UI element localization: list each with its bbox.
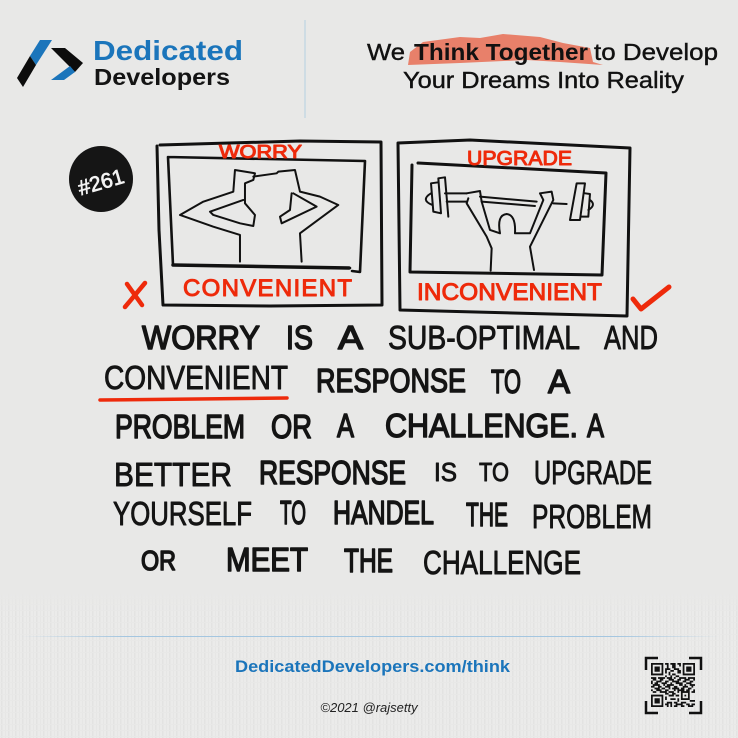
tagline line 1: We [367,39,405,65]
line 3: OR [271,408,312,445]
handwritten message [100,319,658,581]
icon: red cross [125,283,145,307]
worry label: WORRY [219,142,302,162]
footer url: DedicatedDevelopers.com/think [235,657,511,676]
line 5 [113,494,652,535]
tagline [367,34,718,93]
line 3: CHALLENGE. [385,407,578,444]
line 6: THE [344,542,393,579]
icon: weightlifter [426,177,593,271]
brush highlight [408,34,603,65]
line 5: PROBLEM [532,498,652,535]
line 1: AND [604,319,658,356]
line 1 [142,319,658,356]
badge: #261: #261 [76,165,127,200]
line 2: CONVENIENT [104,359,288,396]
line 3: A [337,407,354,444]
line 5: TO [280,494,306,531]
line 4: UPGRADE [534,454,652,491]
QR corner brackets [646,658,701,713]
line 2: TO [491,363,521,400]
line 5: YOURSELF [113,495,252,532]
tagline line 1 [367,39,718,65]
badge: #261 [69,146,133,212]
label: inconvenient: INCONVENIENT [417,279,602,306]
line 1: A [338,319,363,356]
line 2: RESPONSE [316,362,466,399]
upgrade label: UPGRADE [467,148,572,170]
logo mark [17,40,83,87]
line 6 [141,541,581,581]
QR code [646,658,701,713]
tagline line 1: to Develop [594,39,718,65]
upgrade frames [398,140,630,316]
line 6: MEET [226,541,308,578]
line 4: IS [434,457,457,487]
logo wordmark: Developers: Developers [94,64,230,90]
QR modules [651,663,695,707]
worry frames [157,141,382,306]
line 2 [104,359,570,400]
line 3 [115,407,604,445]
logo [17,35,243,90]
line 6: CHALLENGE [423,544,581,581]
line 6: OR [141,545,176,576]
line 2: A [548,363,570,400]
tagline line 2: Your Dreams Into Reality [403,67,685,93]
line 4: TO [479,457,509,487]
line 1: SUB-OPTIMAL [388,319,580,356]
red underline [100,398,287,400]
line 3: PROBLEM [115,408,245,445]
line 4 [114,454,652,493]
panel: worry [125,141,382,307]
line 3: A [587,407,604,444]
tagline line 1: Think Together [414,39,588,65]
panel: upgrade [398,140,669,316]
line 1: WORRY [142,319,260,356]
logo wordmark: Dedicated: Dedicated [93,35,243,66]
footer divider [20,636,720,637]
line 5: HANDEL [333,494,434,531]
line 5: THE [466,496,508,533]
icon: red check [633,287,669,309]
icon: person holding head [180,170,338,262]
header divider [304,20,306,118]
line 4: RESPONSE [259,454,406,491]
line 4: BETTER [114,456,232,493]
label: convenient: CONVENIENT [183,275,352,302]
copyright: ©2021 @rajsetty [320,700,419,715]
line 1: IS [286,319,313,356]
